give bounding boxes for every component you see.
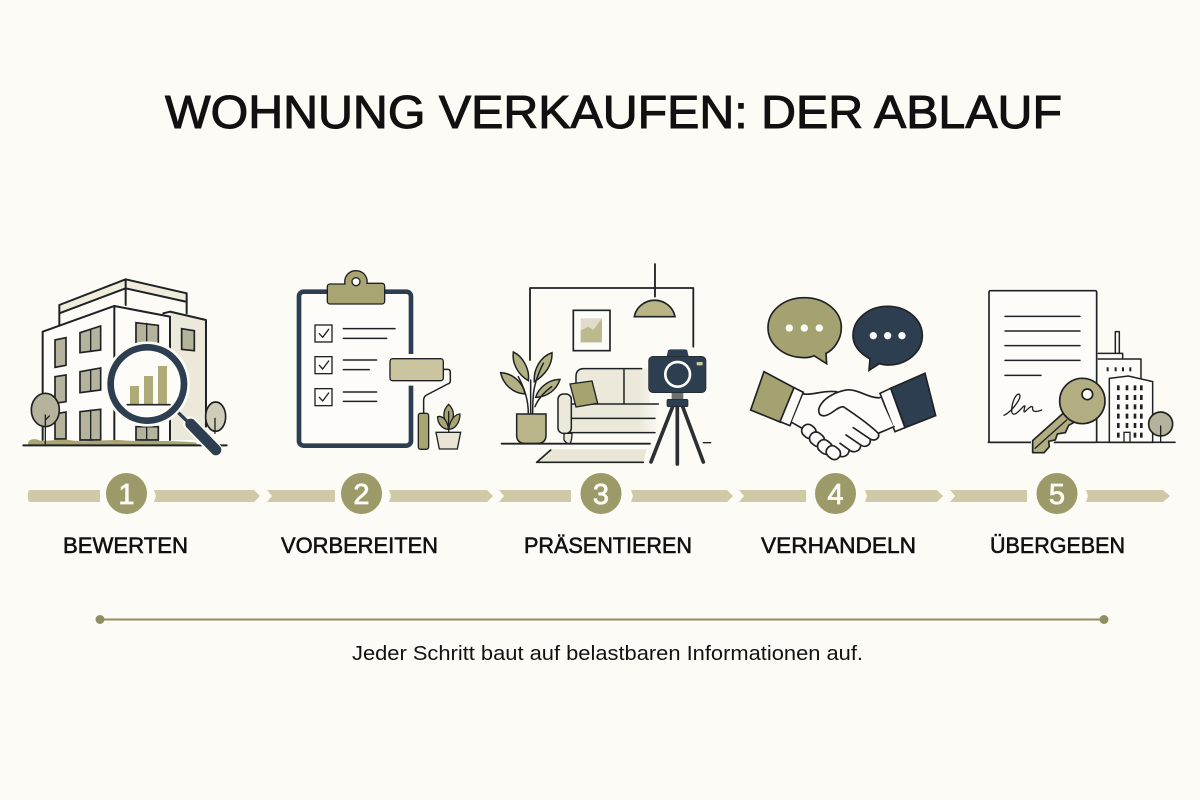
step 5 number xyxy=(1035,472,1079,516)
step 2 number: 2 xyxy=(353,479,370,511)
icon: clipboard with paint roller xyxy=(299,271,461,449)
process arrow track xyxy=(28,490,1170,502)
foundation line xyxy=(96,615,1108,624)
icon: building with magnifier xyxy=(23,279,227,451)
step 1 number: 1 xyxy=(118,479,135,511)
step 4 number: 4 xyxy=(827,479,844,511)
label: Vorbereiten: VORBEREITEN xyxy=(281,533,438,558)
icon: staged living room with camera xyxy=(501,264,711,464)
icon: contract, key and building xyxy=(988,291,1175,453)
step 1 number xyxy=(104,472,148,516)
step 3 number xyxy=(579,472,623,516)
label: Übergeben: ÜBERGEBEN xyxy=(990,533,1125,558)
step 5 number: 5 xyxy=(1049,479,1065,511)
label: Bewerten: BEWERTEN xyxy=(63,533,188,558)
step 4 number xyxy=(814,472,858,516)
label: Präsentieren: PRÄSENTIEREN xyxy=(524,533,692,558)
title: WOHNUNG VERKAUFEN: DER ABLAUF xyxy=(165,86,1062,138)
step 2 number xyxy=(340,472,384,516)
icon: speech bubbles and handshake xyxy=(751,298,936,462)
label: Verhandeln: VERHANDELN xyxy=(761,533,916,558)
step 3 number: 3 xyxy=(593,479,609,511)
closing note: Jeder Schritt baut auf belastbaren Informationen auf. xyxy=(352,643,863,665)
